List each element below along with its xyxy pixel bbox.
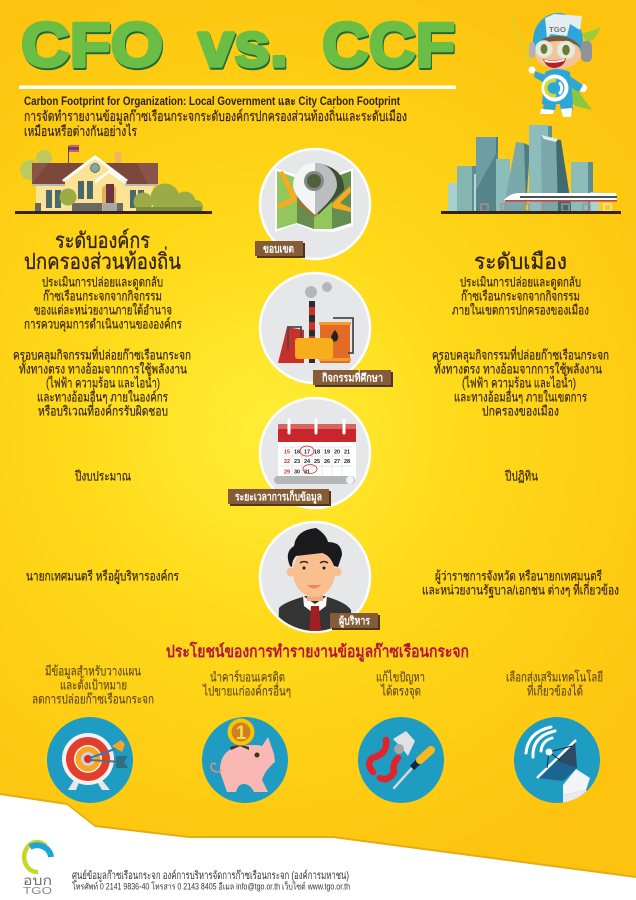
footer contact text: ศูนย์ข้อมูลก๊าซเรือนกระจก องค์การบริหารจัดการก๊าซเรือนกระจก (องค์การมหาชน) — [72, 869, 349, 882]
label: executive — [330, 613, 380, 630]
subtitle: การจัดทำรายงานข้อมูลก๊าซเรือนกระจกระดับองค์กรปกครองส่วนท้องถิ่นและระดับเมือง — [24, 107, 407, 125]
icon: calendar: 21 — [344, 450, 350, 456]
logo: TGO: อบก — [23, 873, 52, 888]
benefit: problem solving — [358, 670, 444, 803]
icon: pliers and screwdriver — [369, 731, 431, 788]
text block: local government column: ครอบคลุมกิจกรรมที่ปล่อยก๊าซเรือนกระจก — [13, 346, 191, 364]
text block: local government column: นายกเทศมนตรี หรือผู้บริหารองค์กร — [26, 568, 179, 584]
heading: local government: ระดับองค์กร — [55, 228, 150, 253]
label: activities — [313, 370, 393, 387]
panel: activities circle — [260, 273, 370, 383]
panel: period circle — [260, 398, 370, 508]
icon: piggy bank: 1 — [236, 723, 247, 744]
text block: local government column: ทั้งทางตรง ทางอ้อมจากการใช้พลังงาน — [19, 360, 187, 376]
icon: mascot — [510, 13, 600, 117]
icon: calendar: 24 — [304, 459, 311, 465]
icon: calendar: 23 — [294, 459, 300, 465]
benefit: technology — [506, 670, 603, 804]
illustration: city skyline — [441, 125, 621, 214]
panel: scope circle — [260, 149, 370, 259]
label: activities: กิจกรรมที่ศึกษา — [322, 370, 383, 384]
icon: calendar — [274, 420, 356, 484]
text block: city column: ประเมินการปล่อยและดูดกลับ — [460, 274, 581, 290]
title: CFO — [22, 13, 164, 82]
label: executive: ผู้บริหาร — [339, 614, 370, 628]
text block: local government column: ก๊าซเรือนกระจกจากกิจกรรม — [43, 288, 162, 304]
subtitle — [24, 96, 407, 139]
text block: local government column: และทางอ้อมอื่นๆ ภายในองค์กร — [37, 388, 168, 404]
text block: city column: (ไฟฟ้า ความร้อน และไอน้ำ) — [462, 374, 576, 390]
text block: local government column: การควบคุมการดำเนินงานขององค์กร — [24, 316, 182, 332]
text block: city column: ปีปฏิทิน — [504, 468, 538, 484]
icon: calendar: 16 — [294, 450, 300, 456]
icon: calendar: 19 — [324, 450, 330, 456]
benefit: planning: มีข้อมูลสำหรับวางแผน — [45, 664, 141, 680]
footer contact text: โทรศัพท์ 0 2141 9836-40 โทรสาร 0 2143 8405 อีเมล info@tgo.or.th เว็บไซต์ www.tgo.or.th — [72, 880, 350, 892]
benefit: carbon credit: ไปขายแก่องค์กรอื่นๆ — [202, 682, 291, 698]
illustration: government house — [15, 145, 212, 214]
icon: calendar: 31 — [304, 470, 310, 476]
icon: satellite dish — [526, 727, 590, 804]
icon: calendar: 25 — [314, 459, 320, 465]
icon: mascot: TGO — [549, 27, 567, 34]
benefit: problem solving: แก้ไขปัญหา — [376, 670, 425, 684]
text block: local government column: หรือบริเวณที่องค์กรรับผิดชอบ — [38, 402, 168, 418]
text block: city column: ปกครองของเมือง — [482, 404, 559, 418]
subtitle: เหมือนหรือต่างกันอย่างไร — [24, 123, 137, 139]
icon: calendar: 26 — [324, 459, 330, 465]
title: CFO — [21, 11, 163, 80]
text block: local government column — [13, 228, 191, 584]
benefit: planning — [32, 664, 154, 803]
text block: city column: และทางอ้อมอื่นๆ ภายในเขตการ — [454, 388, 587, 404]
text block: city column: ก๊าซเรือนกระจกจากกิจกรรม — [461, 288, 580, 304]
text block: local government column: ประเมินการปล่อยและดูดกลับ — [42, 274, 163, 290]
icon: calendar: 17 — [304, 450, 310, 456]
icon: calendar: 22 — [284, 459, 290, 465]
panel: executive circle — [260, 522, 370, 632]
text block: local government column: ปีงบประมาณ — [74, 468, 131, 484]
label: scope: ขอบเขต — [263, 244, 294, 256]
icon: calendar: 30 — [294, 470, 300, 476]
benefit: planning: ลดการปล่อยก๊าซเรือนกระจก — [32, 692, 154, 706]
text block: city column: ภายในเขตการปกครองของเมือง — [452, 302, 589, 318]
text block: local government column: (ไฟฟ้า ความร้อน และไอน้ำ) — [46, 374, 160, 390]
heading: local government: ปกครองส่วนท้องถิ่น — [24, 246, 181, 274]
logo: TGO: TGO — [23, 886, 52, 897]
heading: benefits: ประโยชน์ของการทำรายงานข้อมูลก๊าซเรือนกระจก — [166, 641, 469, 663]
icon: calendar: 20 — [334, 450, 340, 456]
label: data period — [228, 489, 331, 506]
icon: factory and oil — [278, 282, 353, 363]
icon: calendar: 18 — [314, 450, 320, 456]
logo: TGO — [23, 842, 52, 897]
icon: folded map — [275, 163, 353, 232]
benefit: carbon credit: นำคาร์บอนเครดิต — [210, 670, 285, 684]
benefit: problem solving: ได้ตรงจุด — [380, 684, 421, 700]
footer contact text — [72, 869, 350, 892]
benefit: carbon credit — [202, 670, 291, 803]
title: CCF — [323, 13, 456, 82]
icon: calendar: 27 — [334, 459, 340, 465]
benefit: technology: เลือกส่งเสริมเทคโนโลยี — [506, 670, 603, 684]
label: data period: ระยะเวลาการเก็บข้อมูล — [235, 490, 322, 504]
icon: calendar: 29 — [284, 470, 290, 476]
title: vs. — [199, 13, 289, 82]
subtitle: Carbon Footprint for Organization: Local Government และ City Carbon Footprint — [24, 96, 400, 108]
icon: target — [62, 733, 128, 790]
benefit: planning: และตั้งเป้าหมาย — [60, 676, 127, 692]
footer white panel — [0, 793, 636, 900]
title: CCF — [322, 11, 455, 80]
heading: city: ระดับเมือง — [474, 249, 567, 274]
icon: calendar: 28 — [344, 459, 350, 465]
icon: executive portrait — [278, 528, 352, 632]
heading: local government — [24, 228, 181, 274]
title — [21, 11, 456, 82]
label: scope — [255, 241, 305, 258]
text block: city column — [422, 249, 619, 598]
benefit: technology: ที่เกี่ยวข้องได้ — [527, 682, 583, 698]
title: vs. — [198, 11, 288, 80]
icon: calendar: 15 — [284, 450, 290, 456]
text block: local government column: ของแต่ละหน่วยงานภายใต้อำนาจ — [34, 302, 172, 318]
